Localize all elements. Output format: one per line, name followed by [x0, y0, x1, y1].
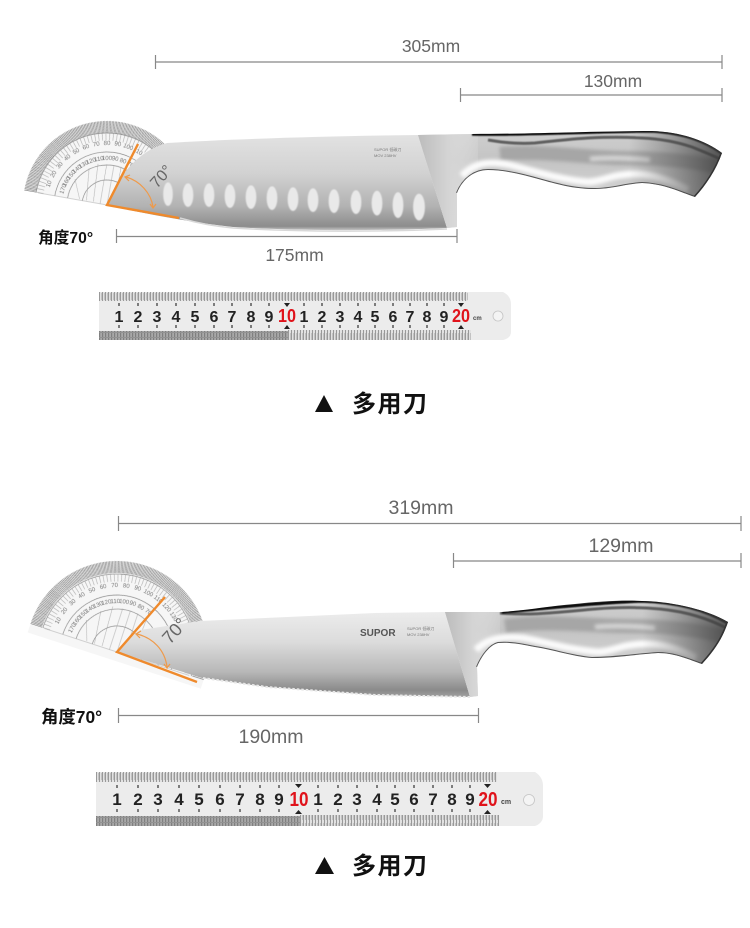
protractor, knife 2: 70 — [111, 583, 119, 589]
dimension: 129mm handle length, knife 2 — [454, 535, 741, 568]
protractor, knife 2: 160 — [72, 615, 83, 627]
protractor, knife 1: 50 — [72, 148, 81, 156]
ruler numbers: 9 — [274, 790, 284, 809]
ruler numbers: 7 — [235, 790, 245, 809]
protractor, knife 1: 70 — [93, 141, 101, 148]
ruler numbers: 4 — [174, 790, 184, 809]
ruler numbers: 8 — [255, 790, 265, 809]
knife 1: bolster and handle — [418, 125, 728, 230]
ruler numbers: 7 — [428, 790, 438, 809]
dimension: 175mm blade length, knife 1 — [116, 229, 457, 265]
ruler numbers — [112, 789, 511, 811]
ruler numbers: 2 — [133, 790, 143, 809]
protractor, knife 2: 150 — [78, 609, 90, 620]
angle label, knife 1: 角度70° — [38, 228, 93, 247]
ruler numbers: 8 — [247, 309, 256, 326]
ruler numbers: 9 — [440, 309, 449, 326]
ruler numbers: 5 — [371, 309, 380, 326]
protractor, knife 1: 170 — [59, 183, 69, 195]
dimension: 319mm total length, knife 2: 319mm — [388, 497, 454, 519]
dimension: 175mm blade length, knife 1: 175mm — [265, 245, 324, 265]
protractor, knife 2: 60 — [99, 584, 108, 591]
ruler numbers: 7 — [228, 309, 237, 326]
protractor, knife 1: 110 — [94, 156, 105, 163]
ruler numbers: 1 — [300, 309, 309, 326]
protractor, knife 1: 20 — [50, 170, 59, 179]
ruler numbers: 10 — [290, 789, 308, 811]
ruler numbers: 7 — [406, 309, 415, 326]
granton hollows — [163, 182, 425, 220]
ruler numbers: 1 — [115, 309, 124, 326]
protractor, knife 2: 80 — [136, 604, 145, 612]
protractor, knife 1: 110 — [132, 147, 144, 157]
angle markers, knife 1: 70° — [147, 162, 176, 192]
ruler, knife 2 — [96, 772, 543, 826]
protractor, knife 2: 110 — [110, 599, 121, 605]
dimension: 190mm blade length, knife 2: 190mm — [238, 726, 304, 748]
protractor, knife 1: 130 — [78, 160, 90, 170]
protractor, knife 1: 10 — [46, 179, 54, 188]
ruler numbers: cm — [473, 316, 482, 322]
protractor, knife 2: 100 — [142, 589, 154, 599]
protractor, knife 1: 150 — [66, 169, 78, 181]
ruler numbers: 3 — [352, 790, 362, 809]
protractor, knife 2: 90 — [128, 601, 137, 609]
dimension: 305mm total length, knife 1: 305mm — [402, 36, 460, 56]
ruler numbers: 2 — [333, 790, 343, 809]
protractor, knife 2: 130 — [168, 611, 179, 623]
section caption 1: 多用刀 — [352, 391, 428, 418]
angle markers, knife 2: 70° — [158, 614, 191, 648]
ruler numbers: 4 — [172, 309, 181, 326]
protractor, knife 2: 90 — [133, 585, 142, 593]
blade stamp, knife 2: MOV 238HV — [407, 632, 430, 637]
protractor, knife 2: 30 — [68, 598, 78, 607]
protractor, knife 1: 70 — [126, 161, 135, 170]
ruler numbers: 6 — [215, 790, 225, 809]
protractor, knife 2: 70 — [143, 608, 153, 617]
protractor, knife 1: 60 — [82, 143, 91, 152]
ruler numbers — [115, 306, 482, 326]
protractor, knife 2: 20 — [61, 606, 70, 616]
protractor, knife 1: 160 — [62, 176, 73, 188]
ruler numbers: 10 — [278, 306, 296, 326]
ruler numbers: 6 — [409, 790, 419, 809]
protractor, knife 2: 120 — [160, 602, 172, 614]
ruler numbers: 3 — [153, 309, 162, 326]
ruler numbers: 4 — [372, 790, 382, 809]
protractor, knife 1: 140 — [72, 164, 84, 175]
ruler numbers: 4 — [354, 309, 363, 326]
ruler numbers: 8 — [423, 309, 432, 326]
ruler numbers: 5 — [194, 790, 204, 809]
ruler numbers: 20 — [478, 789, 498, 811]
ruler numbers: 5 — [191, 309, 200, 326]
protractor, knife 1: 30 — [56, 161, 65, 170]
ruler numbers: 3 — [153, 790, 163, 809]
protractor, knife 1: 90 — [111, 156, 119, 163]
dimension: 319mm total length, knife 2 — [118, 497, 741, 531]
blade stamp, knife 1 — [374, 146, 401, 158]
protractor, knife 1 — [24, 108, 204, 220]
dimension: 305mm total length, knife 1 — [156, 36, 722, 69]
protractor, knife 2: 100 — [119, 599, 130, 606]
protractor, knife 2: 140 — [85, 604, 97, 615]
ruler numbers: cm — [501, 799, 511, 806]
section caption 1 — [315, 391, 428, 418]
protractor, knife 2: 40 — [78, 591, 87, 600]
ruler, knife 1 — [99, 292, 511, 340]
dimension: 190mm blade length, knife 2 — [118, 708, 478, 748]
protractor, knife 2: 120 — [101, 599, 113, 607]
ruler numbers: 20 — [452, 306, 470, 326]
dimension: 129mm handle length, knife 2: 129mm — [588, 535, 654, 557]
protractor, knife 1: 90 — [114, 141, 122, 149]
protractor, knife 1: 100 — [122, 143, 134, 152]
ruler numbers: 9 — [265, 309, 274, 326]
ruler numbers: 6 — [210, 309, 219, 326]
angle markers, knife 2 — [117, 597, 197, 682]
dimension: 130mm handle length, knife 1 — [460, 71, 722, 102]
ruler numbers: 2 — [134, 309, 143, 326]
ruler numbers: 2 — [318, 309, 327, 326]
blade stamp, knife 2: SUPOR 低碳刀 — [407, 625, 434, 631]
protractor, knife 1: 80 — [119, 158, 128, 166]
knife 1: santoku blade — [107, 135, 447, 231]
section caption 2: 多用刀 — [352, 853, 428, 880]
protractor, knife 2: 110 — [152, 595, 164, 606]
protractor, knife 1: 40 — [63, 153, 73, 163]
ruler numbers: 6 — [389, 309, 398, 326]
ruler numbers: 3 — [336, 309, 345, 326]
ruler numbers: 1 — [313, 790, 323, 809]
angle label, knife 2: 角度70° — [41, 707, 102, 727]
protractor, knife 2: 80 — [122, 583, 131, 590]
ruler numbers: 5 — [390, 790, 400, 809]
protractor, knife 1: 100 — [102, 156, 113, 162]
protractor, knife 1: 120 — [86, 157, 98, 166]
angle markers, knife 1 — [107, 144, 179, 218]
brand mark: SUPOR — [360, 628, 396, 639]
protractor, knife 2: 10 — [55, 616, 63, 625]
ruler numbers: 8 — [447, 790, 457, 809]
blade stamp, knife 1: MOV 238HV — [374, 153, 397, 158]
protractor, knife 2: 130 — [93, 601, 105, 610]
blade stamp, knife 1: SUPOR 低碳刀 — [374, 146, 401, 152]
dimension: 130mm handle length, knife 1: 130mm — [584, 71, 642, 91]
knife 2: serrated blade — [117, 612, 470, 697]
section caption 2 — [315, 853, 428, 880]
protractor, knife 2: 170 — [68, 622, 78, 634]
protractor, knife 2 — [28, 537, 232, 689]
blade stamp, knife 2 — [407, 625, 434, 637]
ruler numbers: 1 — [112, 790, 122, 809]
protractor, knife 1: 80 — [104, 141, 111, 147]
knife 2: bolster and handle — [445, 600, 728, 697]
ruler numbers: 9 — [465, 790, 475, 809]
protractor, knife 2: 50 — [88, 587, 97, 595]
